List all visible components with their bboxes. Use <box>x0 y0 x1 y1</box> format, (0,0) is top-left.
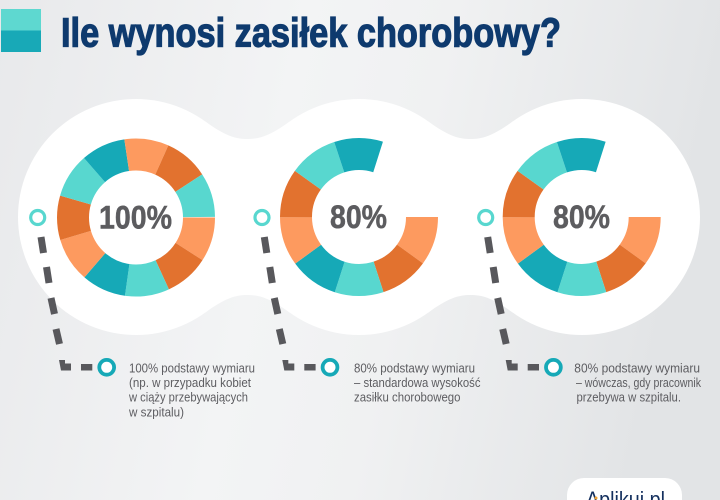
donut chart: 80% hospital <box>519 154 645 280</box>
icon: title square <box>1 9 41 52</box>
text block: 100% description <box>128 360 255 419</box>
text block: 100% description: 100% podstawy wymiaru <box>129 360 255 376</box>
donut value: 80% standard: 80% <box>330 199 387 235</box>
dashed connector 1 <box>31 210 114 375</box>
donut value: 80% hospital: 80% <box>553 199 610 235</box>
dashed connector 3 <box>479 210 561 375</box>
dashed connector 2 <box>255 210 337 375</box>
text block: 80% standard description: zasiłku chorobowego <box>354 390 460 405</box>
text block: 100% description: w ciąży przebywających <box>128 390 248 405</box>
logo badge <box>567 478 682 500</box>
text block: 100% description: (np. w przypadku kobiet <box>129 375 251 390</box>
donut chart: 100% <box>73 154 199 280</box>
text block: 80% standard description: 80% podstawy wymiaru <box>354 360 475 376</box>
text block: 100% description: w szpitalu) <box>128 404 184 419</box>
text block: 80% hospital description: 80% podstawy wymiaru <box>574 360 700 376</box>
donut value: 100%: 100% <box>99 200 172 236</box>
panel: white blob behind charts <box>18 99 700 335</box>
text block: 80% hospital description <box>574 360 701 405</box>
text block: 80% hospital description: przebywa w szpitalu. <box>576 390 681 405</box>
title: Ile wynosi zasiłek chorobowy? <box>61 10 561 56</box>
text block: 80% standard description <box>354 360 481 405</box>
text block: 80% standard description: – standardowa wysokość <box>354 375 481 390</box>
donut chart: 80% standard <box>296 154 422 280</box>
